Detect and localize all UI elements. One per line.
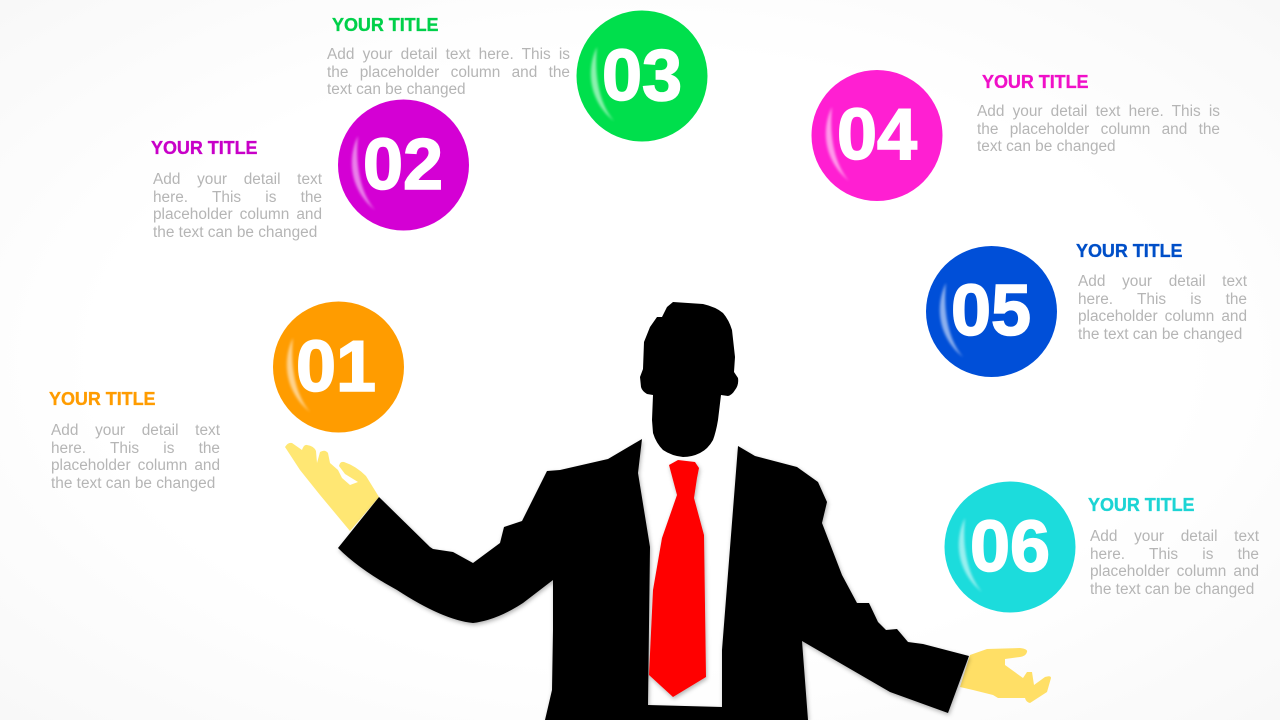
detail text 05: [1078, 273, 1247, 342]
detail text 02: placeholder column and: [153, 206, 322, 223]
title 02: YOUR TITLE: [151, 138, 258, 158]
detail text 05: Add your detail text: [1078, 273, 1247, 290]
title 06: YOUR TITLE: [1088, 495, 1194, 515]
detail text 06: the text can be changed: [1090, 580, 1254, 598]
detail text 04: the placeholder column and the: [977, 120, 1220, 138]
detail text 06: [1090, 528, 1259, 598]
detail text 06: placeholder column and: [1090, 563, 1259, 580]
detail text 02: here. This is the: [153, 188, 322, 206]
detail text 01: placeholder column and: [51, 457, 220, 474]
detail text 05: here. This is the: [1078, 290, 1247, 308]
detail text 03: the placeholder column and the: [327, 64, 570, 80]
detail text 03: Add your detail text here. This is: [327, 46, 570, 63]
circle 01: 01: [296, 327, 376, 407]
detail text 02: the text can be changed: [153, 224, 317, 240]
circle 03: [576, 10, 708, 142]
circle 06: [944, 482, 1076, 612]
right hand: [960, 648, 1051, 703]
circle 05: [926, 246, 1057, 377]
head: [640, 302, 738, 457]
title 01: YOUR TITLE: [49, 389, 156, 409]
circle 06: 06: [970, 507, 1050, 587]
circle 04: [812, 70, 942, 201]
detail text 04: Add your detail text here. This is: [977, 103, 1220, 120]
detail text 01: [51, 422, 220, 492]
left hand: [285, 443, 379, 531]
detail text 01: Add your detail text: [51, 422, 220, 439]
detail text 03: [327, 46, 570, 98]
detail text 02: Add your detail text: [153, 171, 322, 188]
detail text 06: Add your detail text: [1090, 528, 1259, 545]
circle 03: 03: [602, 36, 682, 116]
detail text 04: text can be changed: [977, 138, 1116, 155]
detail text 05: the text can be changed: [1078, 326, 1242, 342]
circle 02: [338, 100, 469, 230]
detail text 02: [153, 171, 322, 240]
title 03: YOUR TITLE: [332, 15, 438, 35]
necktie: [649, 460, 706, 697]
circle 02: 02: [363, 125, 443, 205]
detail text 01: the text can be changed: [51, 474, 215, 492]
circle 01: [273, 302, 404, 432]
detail text 06: here. This is the: [1090, 546, 1259, 562]
detail text 01: here. This is the: [51, 440, 220, 456]
detail text 04: [977, 103, 1220, 155]
title 05: YOUR TITLE: [1076, 241, 1182, 261]
detail text 05: placeholder column and: [1078, 308, 1247, 325]
detail text 03: text can be changed: [327, 81, 466, 98]
circle 04: 04: [837, 95, 917, 175]
suit jacket with arms: [338, 439, 969, 720]
circle 05: 05: [951, 271, 1031, 351]
title 04: YOUR TITLE: [982, 72, 1088, 92]
